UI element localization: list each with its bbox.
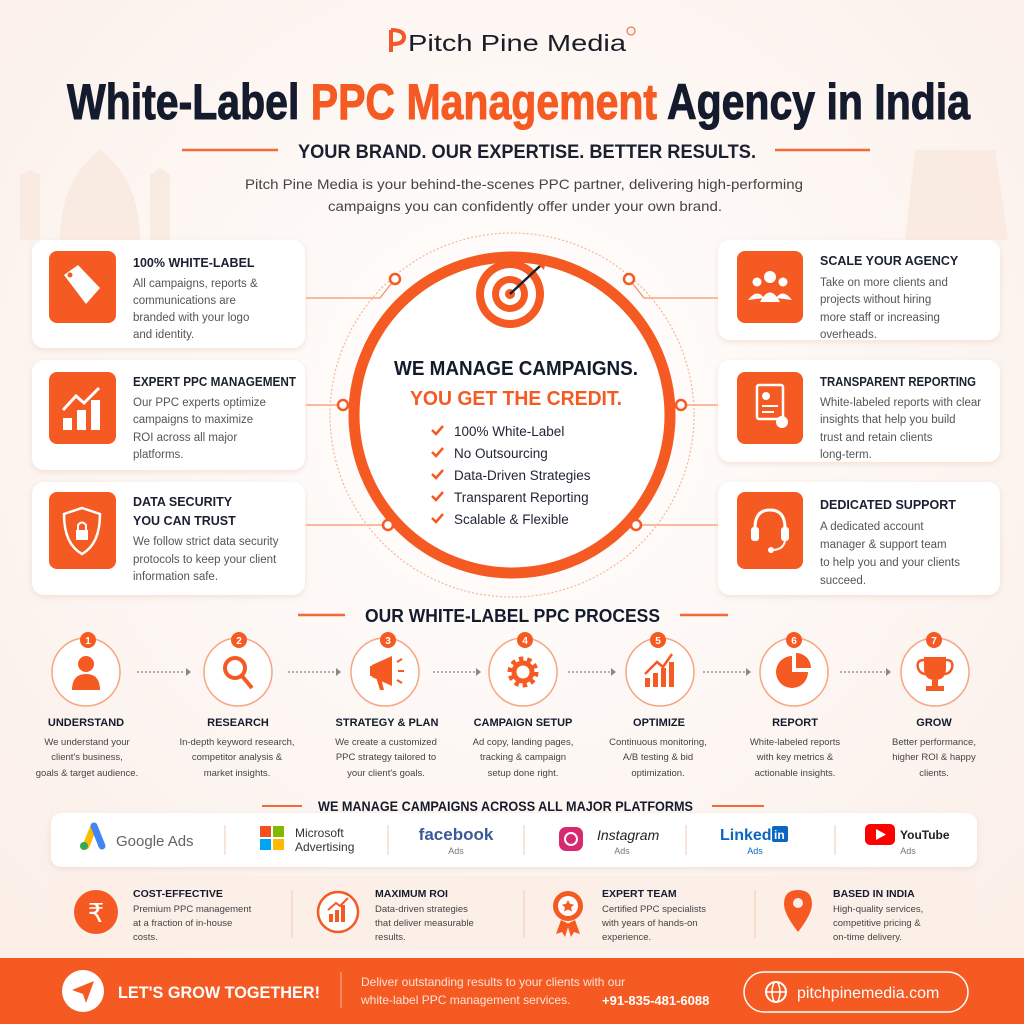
center circle: YOU GET THE CREDIT. xyxy=(410,388,622,410)
step labels: STRATEGY & PLAN xyxy=(336,717,438,729)
icon: location pin xyxy=(784,890,812,932)
panel: expert ppc management: ROI across all major xyxy=(133,432,237,444)
process steps: clients. xyxy=(919,768,949,779)
subtitle: YOUR BRAND. OUR EXPERTISE. BETTER RESULTS. xyxy=(298,142,756,163)
checklist: Data-Driven Strategies xyxy=(454,468,591,483)
logo: microsoft: Microsoft xyxy=(295,826,344,840)
icon: megaphone xyxy=(370,656,404,690)
panel: 100% white-label: branded with your logo xyxy=(133,312,249,324)
panel: scale your agency: projects without hiring xyxy=(820,294,931,306)
intro paragraph xyxy=(245,176,803,214)
panel: expert ppc management xyxy=(32,360,305,470)
panel: benefits: BASED IN INDIA xyxy=(833,888,915,900)
panel: benefits: COST-EFFECTIVE xyxy=(133,888,223,900)
icon: person xyxy=(72,656,100,690)
process steps: actionable insights. xyxy=(755,768,835,779)
step labels: REPORT xyxy=(772,717,818,729)
panel: transparent reporting: insights that help you build xyxy=(820,414,956,426)
panel: benefits: Premium PPC management xyxy=(133,904,252,915)
icon: tag xyxy=(49,251,116,323)
logo: facebook xyxy=(419,825,494,856)
process steps: We create a customized xyxy=(335,737,437,748)
panel: dedicated support: DEDICATED SUPPORT xyxy=(820,498,956,512)
panel: dedicated support: manager & support team xyxy=(820,539,947,551)
panel: transparent reporting xyxy=(718,360,1000,462)
step labels: CAMPAIGN SETUP xyxy=(474,717,572,729)
background: monuments silhouette xyxy=(20,150,1008,240)
process steps: Better performance, xyxy=(892,737,976,748)
icon: pie chart xyxy=(776,653,811,688)
process steps: 7 xyxy=(931,636,937,647)
panel: benefits xyxy=(51,876,977,950)
panel: transparent reporting: White-labeled reports with clear xyxy=(820,397,981,409)
process steps: 5 xyxy=(655,636,661,647)
website pill: pitchpinemedia.com xyxy=(797,985,939,1002)
process steps: your client's goals. xyxy=(347,768,425,779)
logo: youtube: Ads xyxy=(900,846,916,856)
logo: facebook: facebook xyxy=(419,825,494,844)
website pill xyxy=(744,972,968,1012)
logo: google ads xyxy=(80,826,194,850)
panel: dedicated support: A dedicated account xyxy=(820,521,924,533)
panel: scale your agency xyxy=(718,240,1000,341)
checklist: Transparent Reporting xyxy=(454,490,589,505)
process arrows xyxy=(137,671,885,673)
logo: Pitch Pine Media xyxy=(408,30,626,56)
icon: gear xyxy=(511,660,535,684)
logo: instagram: Instagram xyxy=(597,827,660,843)
panel: scale your agency: SCALE YOUR AGENCY xyxy=(820,254,959,268)
panel: transparent reporting: TRANSPARENT REPORTING xyxy=(820,375,976,389)
panel: scale your agency: Take on more clients and xyxy=(820,277,948,289)
checklist: Scalable & Flexible xyxy=(454,512,569,527)
process heading: OUR WHITE-LABEL PPC PROCESS xyxy=(365,606,660,626)
panel: expert ppc management: platforms. xyxy=(133,449,184,461)
logo: linkedin: in xyxy=(774,828,785,842)
process steps: 1 xyxy=(85,636,91,647)
icon: team xyxy=(737,251,803,323)
icon: rupee xyxy=(74,890,118,934)
process steps: optimization. xyxy=(631,768,685,779)
panel: 100% white-label xyxy=(32,240,305,348)
center circle: WE MANAGE CAMPAIGNS. xyxy=(394,358,638,380)
checklist: No Outsourcing xyxy=(454,446,548,461)
panel: benefits: High-quality services, xyxy=(833,904,923,915)
footer banner: +91-835-481-6088 xyxy=(602,993,709,1008)
panel: transparent reporting: long-term. xyxy=(820,449,872,461)
process steps: A/B testing & bid xyxy=(623,752,693,763)
step labels: RESEARCH xyxy=(207,717,269,729)
panel: expert ppc management: Our PPC experts optimize xyxy=(133,397,266,409)
process steps: In-depth keyword research, xyxy=(179,737,295,748)
logo: linkedin: Ads xyxy=(747,846,763,856)
panel: data security xyxy=(32,482,305,595)
connectors xyxy=(306,279,718,525)
logo: instagram xyxy=(559,827,660,856)
icon: report document xyxy=(737,372,803,444)
panel: benefits: experience. xyxy=(602,932,651,943)
panel: 100% white-label: communications are xyxy=(133,295,236,307)
panel: dedicated support xyxy=(718,482,1000,595)
process steps: higher ROI & happy xyxy=(892,752,976,763)
step labels xyxy=(48,717,952,729)
process steps xyxy=(36,632,976,779)
panel: dedicated support: succeed. xyxy=(820,575,866,587)
process steps: We understand your xyxy=(44,737,130,748)
process steps: market insights. xyxy=(204,768,270,779)
center circle xyxy=(330,233,694,597)
checklist: 100% White-Label xyxy=(454,424,564,439)
icon: badge xyxy=(553,891,583,937)
process steps: 4 xyxy=(522,636,528,647)
icon: trophy xyxy=(918,657,952,691)
logo: google ads: Google Ads xyxy=(116,833,194,850)
logo: linkedin xyxy=(720,826,788,856)
panel: scale your agency: overheads. xyxy=(820,329,877,341)
logo: youtube: YouTube xyxy=(900,828,950,842)
panel: benefits: EXPERT TEAM xyxy=(602,888,677,900)
process steps: 6 xyxy=(791,636,797,647)
logo: facebook: Ads xyxy=(448,846,464,856)
icon: rupee: ₹ xyxy=(88,898,104,928)
panel: data security: DATA SECURITY xyxy=(133,495,233,509)
panel: benefits: at a fraction of in-house xyxy=(133,918,232,929)
intro paragraph: campaigns you can confidently offer under your own brand. xyxy=(328,198,722,214)
icon: roi xyxy=(318,892,358,932)
panel: benefits: on-time delivery. xyxy=(833,932,902,943)
process steps: PPC strategy tailored to xyxy=(336,752,436,763)
panel: benefits: MAXIMUM ROI xyxy=(375,888,448,900)
panel: 100% white-label: and identity. xyxy=(133,329,194,341)
panel: data security: YOU CAN TRUST xyxy=(133,514,236,528)
icon: shield lock xyxy=(49,492,116,569)
logo: microsoft xyxy=(260,826,354,854)
panel: dedicated support: to help you and your clients xyxy=(820,557,960,569)
footer banner: LET'S GROW TOGETHER! xyxy=(118,983,320,1002)
panel: benefits: Data-driven strategies xyxy=(375,904,468,915)
panel: platforms xyxy=(51,813,977,867)
footer banner: Deliver outstanding results to your clients with our xyxy=(361,975,625,989)
panel: 100% white-label: 100% WHITE-LABEL xyxy=(133,256,255,270)
panel: data security: We follow strict data security xyxy=(133,536,279,548)
icon: paper plane xyxy=(62,970,104,1012)
logo: instagram: Ads xyxy=(614,846,630,856)
logo: microsoft: Advertising xyxy=(295,840,354,854)
panel: 100% white-label: All campaigns, reports & xyxy=(133,278,258,290)
process steps: tracking & campaign xyxy=(480,752,566,763)
platforms heading: WE MANAGE CAMPAIGNS ACROSS ALL MAJOR PLATFORMS xyxy=(318,798,693,814)
process steps: White-labeled reports xyxy=(750,737,840,748)
panel: transparent reporting: trust and retain clients xyxy=(820,432,933,444)
panel: benefits: that deliver measurable xyxy=(375,918,474,929)
panel: data security: information safe. xyxy=(133,571,218,583)
footer banner: white-label PPC management services. xyxy=(360,993,570,1007)
process steps: goals & target audience. xyxy=(36,768,138,779)
process steps: competitor analysis & xyxy=(192,752,283,763)
panel: benefits: results. xyxy=(375,932,406,943)
icon: growth chart xyxy=(49,372,116,444)
panel: data security: protocols to keep your client xyxy=(133,554,277,566)
process steps: 3 xyxy=(385,636,391,647)
panel: benefits: costs. xyxy=(133,932,158,943)
logo xyxy=(391,27,635,56)
panel: expert ppc management: EXPERT PPC MANAGEMENT xyxy=(133,375,296,389)
logo: youtube xyxy=(865,824,950,856)
icon: magnifier xyxy=(225,658,252,688)
icon: optimize chart xyxy=(645,654,674,687)
checklist xyxy=(432,424,591,527)
panel: benefits: with years of hands-on xyxy=(601,918,698,929)
step labels: OPTIMIZE xyxy=(633,717,685,729)
process steps: Ad copy, landing pages, xyxy=(473,737,573,748)
panel: scale your agency: more staff or increasing xyxy=(820,312,940,324)
process steps: with key metrics & xyxy=(756,752,834,763)
step labels: UNDERSTAND xyxy=(48,717,124,729)
title: White-Label PPC Management Agency in India xyxy=(67,74,971,130)
intro paragraph: Pitch Pine Media is your behind-the-scenes PPC partner, delivering high-performing xyxy=(245,176,803,192)
process steps: Continuous monitoring, xyxy=(609,737,707,748)
icon: target xyxy=(476,260,546,328)
process steps: 2 xyxy=(236,636,242,647)
icon: headset xyxy=(737,492,803,569)
process steps: client's business, xyxy=(51,752,123,763)
panel: expert ppc management: campaigns to maximize xyxy=(133,414,253,426)
panel: benefits: competitive pricing & xyxy=(833,918,921,929)
logo: linkedin: Linked xyxy=(720,827,772,844)
step labels: GROW xyxy=(916,717,952,729)
panel: benefits: Certified PPC specialists xyxy=(602,904,706,915)
process steps: setup done right. xyxy=(488,768,558,779)
footer banner xyxy=(0,958,1024,1024)
